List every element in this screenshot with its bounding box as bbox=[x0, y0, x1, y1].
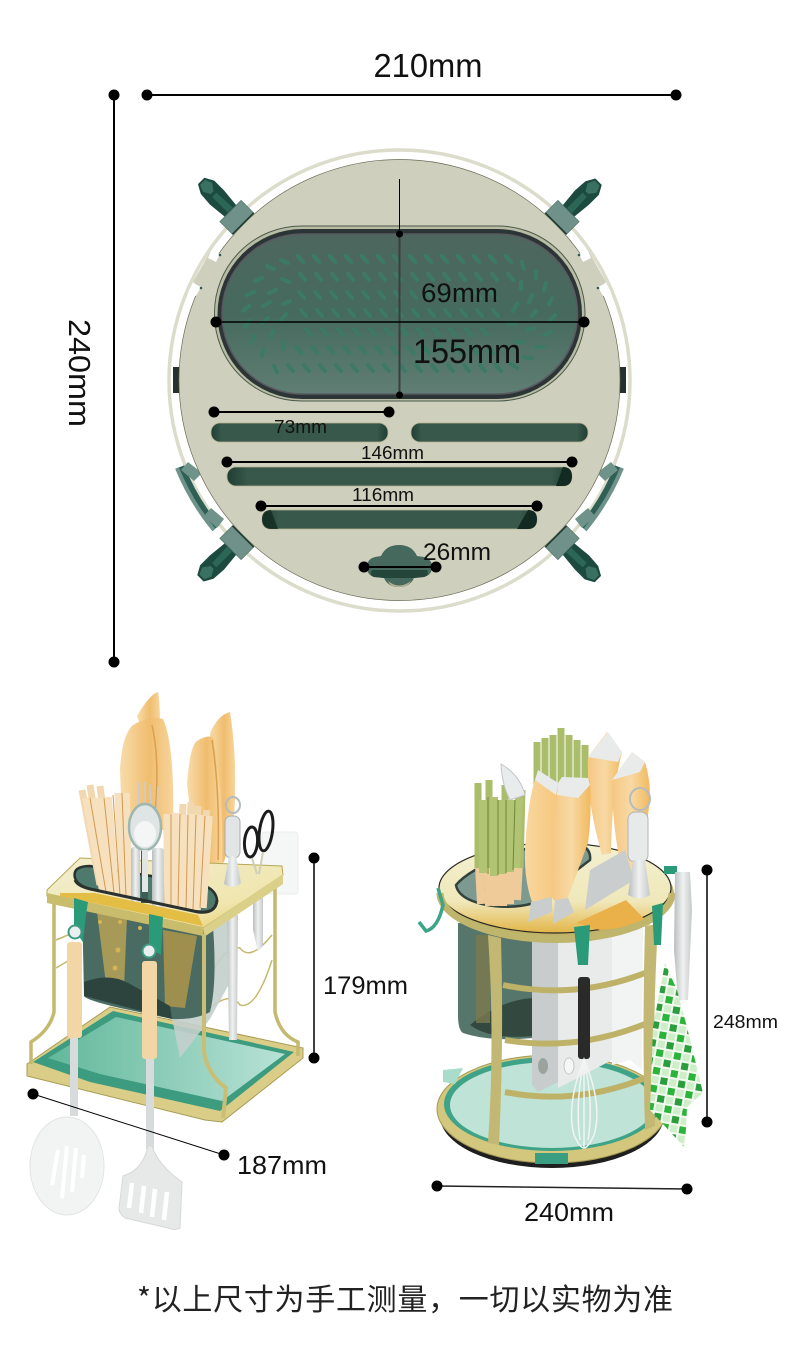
dimension: basket depth 69mm bbox=[396, 179, 498, 398]
back knife blade tip bbox=[501, 764, 525, 800]
back frame wires bbox=[31, 868, 298, 1064]
tongs bbox=[674, 872, 692, 1000]
large oval basket opening bbox=[214, 226, 585, 401]
back green chopsticks bbox=[537, 728, 585, 790]
dimension: overall depth 240mm: 240mm bbox=[62, 319, 97, 427]
dimension: length 187mm: 187mm bbox=[237, 1150, 327, 1180]
left chopsticks bundle bbox=[82, 785, 129, 898]
top view: round rack plate bbox=[169, 150, 630, 611]
translucent basket bbox=[82, 900, 215, 1019]
drain holes bbox=[243, 256, 555, 372]
slot shading bbox=[262, 467, 572, 529]
green translucent basket bbox=[458, 923, 533, 1039]
product photo: round rack with utensils bbox=[419, 728, 703, 1168]
dimension: diameter 240mm bbox=[432, 1180, 692, 1227]
dimension: overall depth 240mm bbox=[62, 90, 120, 668]
hanging slotted ladle bbox=[30, 926, 104, 1215]
front leg frame bbox=[204, 934, 226, 1118]
rack top plate bbox=[47, 858, 283, 937]
dimension: slot 73mm: 73mm bbox=[274, 417, 327, 437]
hanging slotted turner bbox=[119, 944, 182, 1230]
dimension: height 248mm bbox=[702, 864, 778, 1128]
dimension: drain 26mm bbox=[358, 539, 491, 572]
basket drain detail bbox=[470, 998, 533, 1037]
plate tabs and notches bbox=[188, 251, 611, 296]
rack legs bbox=[488, 924, 658, 1145]
green hook left bbox=[419, 888, 443, 931]
dimension: basket width 155mm: 155mm bbox=[413, 333, 521, 371]
dimension: slot 73mm bbox=[208, 406, 394, 437]
peeler tool bbox=[224, 797, 241, 887]
dimension: slot 116mm bbox=[256, 485, 542, 512]
dimension: overall width 210mm bbox=[142, 47, 682, 100]
side clips bbox=[173, 367, 626, 530]
knife blades bbox=[172, 880, 263, 1058]
right chopsticks bundle bbox=[167, 802, 209, 910]
base tray bbox=[437, 1055, 667, 1168]
dimension: overall width 210mm: 210mm bbox=[374, 47, 482, 84]
spoon and fork bbox=[129, 782, 164, 908]
green clips on rim bbox=[574, 866, 677, 965]
product photo: square rack with utensils bbox=[27, 692, 303, 1230]
peeler tool bbox=[628, 788, 650, 898]
dimension: height 248mm: 248mm bbox=[713, 1012, 778, 1032]
dimension: height 179mm: 179mm bbox=[323, 972, 408, 1000]
dimension: basket width 155mm bbox=[210, 316, 590, 371]
dimension: length 187mm bbox=[28, 1088, 327, 1180]
chopsticks inside basket bbox=[476, 935, 490, 1023]
clover-shaped drain opening bbox=[367, 545, 432, 587]
dimension: height 179mm bbox=[308, 852, 408, 1064]
opening front lip and gold band bbox=[60, 880, 217, 926]
front green chopsticks bbox=[478, 780, 522, 906]
base tray frame bbox=[27, 1007, 303, 1122]
rim band front bbox=[440, 893, 672, 939]
adhesive hook plate bbox=[262, 832, 298, 894]
rack rings bbox=[503, 973, 645, 1097]
whisk bbox=[572, 977, 597, 1148]
utensil slots bbox=[211, 423, 588, 529]
outer ring bbox=[169, 150, 630, 611]
plate disc bbox=[179, 160, 620, 600]
footnote: *以上尺寸为手工测量，一切以实物为准 bbox=[137, 1275, 673, 1319]
green clips bbox=[74, 898, 163, 955]
scissors bbox=[243, 810, 275, 874]
dimension: drain 26mm: 26mm bbox=[423, 539, 491, 566]
icon: corner feet bbox=[190, 171, 609, 589]
dimension: slot 116mm: 116mm bbox=[352, 485, 414, 505]
wood knife handles bbox=[120, 692, 235, 870]
silver knife blades bbox=[532, 928, 643, 1092]
round top plate bbox=[438, 842, 674, 943]
checkered towel bbox=[650, 963, 703, 1148]
chopsticks and drain inside basket bbox=[84, 912, 197, 1019]
dimension: diameter 240mm: 240mm bbox=[524, 1197, 614, 1227]
dimension: slot 146mm bbox=[222, 443, 578, 468]
dimension: basket depth 69mm: 69mm bbox=[421, 278, 498, 308]
dimension: slot 146mm: 146mm bbox=[361, 443, 424, 463]
knife handles bbox=[525, 732, 650, 924]
